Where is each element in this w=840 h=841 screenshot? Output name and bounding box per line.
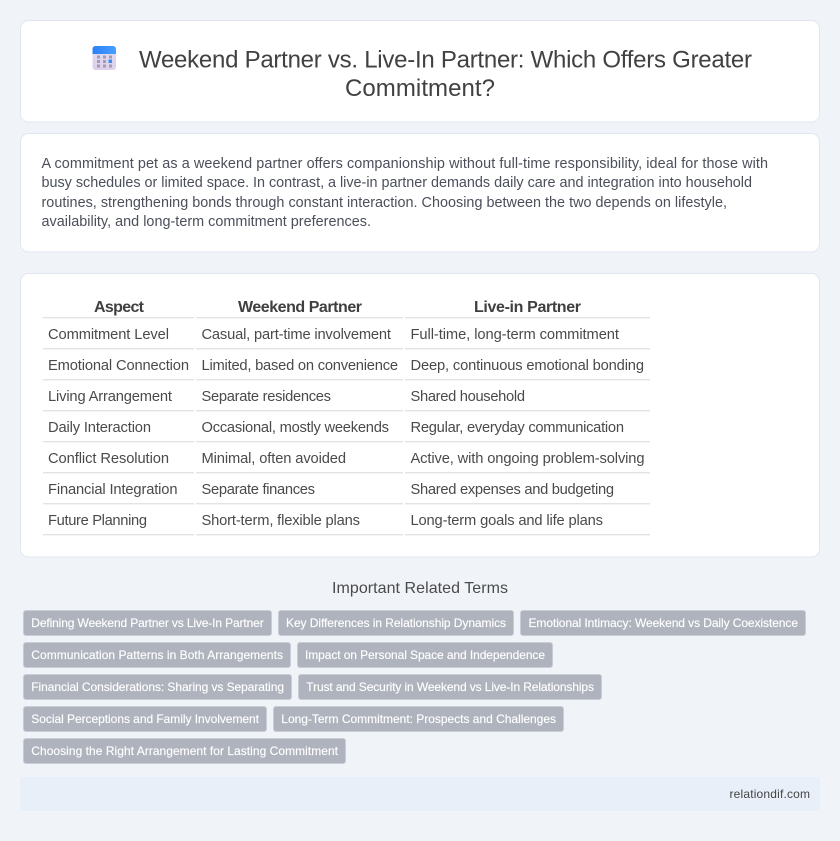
panel: comparison table <box>20 274 820 557</box>
tag: Communication Patterns in Both Arrangements <box>31 648 283 662</box>
tag <box>298 642 552 668</box>
row: Living Arrangement <box>43 389 650 411</box>
title: Commitment? <box>345 75 495 102</box>
panel: intro text <box>20 134 820 252</box>
tag: Key Differences in Relationship Dynamics <box>286 616 506 630</box>
tag <box>24 642 290 668</box>
table header: Aspect <box>94 299 145 316</box>
table header: Weekend Partner <box>238 299 362 316</box>
row: Conflict Resolution: Minimal, often avoided <box>202 451 346 467</box>
row: Emotional Connection: Deep, continuous emotional bonding <box>410 358 644 374</box>
row: Emotional Connection <box>43 358 650 380</box>
intro paragraph: A commitment pet as a weekend partner offers companionship without full-time responsibility, ideal for those with <box>42 156 768 172</box>
row: Future Planning: Future Planning <box>48 513 147 529</box>
row: Daily Interaction: Daily Interaction <box>48 420 151 436</box>
intro paragraph: routines, strengthening bonds through constant interaction. Choosing between the two depends on lifestyle, <box>42 195 727 211</box>
row: Conflict Resolution <box>43 451 650 473</box>
row: Conflict Resolution: Conflict Resolution <box>48 451 169 467</box>
row: Emotional Connection: Emotional Connection <box>48 358 189 374</box>
row: Living Arrangement: Shared household <box>410 389 525 405</box>
row: Commitment Level: Casual, part-time involvement <box>202 327 391 343</box>
tag list: related terms <box>24 610 806 764</box>
title <box>139 46 752 102</box>
tag <box>24 706 266 732</box>
tag: Defining Weekend Partner vs Live-In Partner <box>31 616 264 630</box>
row: Daily Interaction: Occasional, mostly weekends <box>202 420 389 436</box>
tag: Impact on Personal Space and Independence <box>305 648 545 662</box>
table header <box>94 299 581 316</box>
tag: Emotional Intimacy: Weekend vs Daily Coexistence <box>528 616 798 630</box>
tag <box>520 610 806 636</box>
tag: Social Perceptions and Family Involvement <box>31 712 260 726</box>
row: Financial Integration: Shared expenses and budgeting <box>410 482 614 498</box>
footer <box>20 777 820 811</box>
icon: calendar <box>92 46 116 70</box>
intro paragraph <box>42 156 768 230</box>
row: Future Planning: Short-term, flexible plans <box>202 513 360 529</box>
row: Future Planning: Long-term goals and life plans <box>410 513 603 529</box>
row: Daily Interaction: Regular, everyday communication <box>410 420 624 436</box>
panel: header <box>20 20 820 122</box>
tag <box>24 674 292 700</box>
tag: Choosing the Right Arrangement for Lasting Commitment <box>31 744 339 758</box>
row: Conflict Resolution: Active, with ongoing problem-solving <box>410 451 644 467</box>
tag <box>298 674 602 700</box>
row: Financial Integration <box>43 482 650 504</box>
tag <box>278 610 514 636</box>
row: Commitment Level: Commitment Level <box>48 327 169 343</box>
row: Living Arrangement: Separate residences <box>202 389 331 405</box>
title: Weekend Partner vs. Live-In Partner: Which Offers Greater <box>139 46 752 74</box>
row: Commitment Level: Full-time, long-term commitment <box>410 327 619 343</box>
tag <box>24 738 346 764</box>
tag: Long-Term Commitment: Prospects and Challenges <box>281 712 556 726</box>
tag: Financial Considerations: Sharing vs Separating <box>31 680 284 694</box>
heading: related terms: Important Related Terms <box>332 580 508 597</box>
tag <box>274 706 564 732</box>
row: Living Arrangement: Living Arrangement <box>48 389 172 405</box>
row: Commitment Level <box>43 317 650 349</box>
tag: Trust and Security in Weekend vs Live-In Relationships <box>306 680 594 694</box>
tag <box>24 610 272 636</box>
row: Future Planning <box>43 513 650 535</box>
intro paragraph: availability, and long-term commitment preferences. <box>42 214 371 230</box>
row: Financial Integration: Financial Integration <box>48 482 178 498</box>
row: Daily Interaction <box>43 420 650 442</box>
row: Emotional Connection: Limited, based on convenience <box>202 358 398 374</box>
table header: Live-in Partner <box>474 299 581 316</box>
footer: relationdif.com <box>730 787 810 801</box>
intro paragraph: busy schedules or limited space. In contrast, a live-in partner demands daily care and integration into household <box>42 175 752 191</box>
row: Financial Integration: Separate finances <box>202 482 315 498</box>
